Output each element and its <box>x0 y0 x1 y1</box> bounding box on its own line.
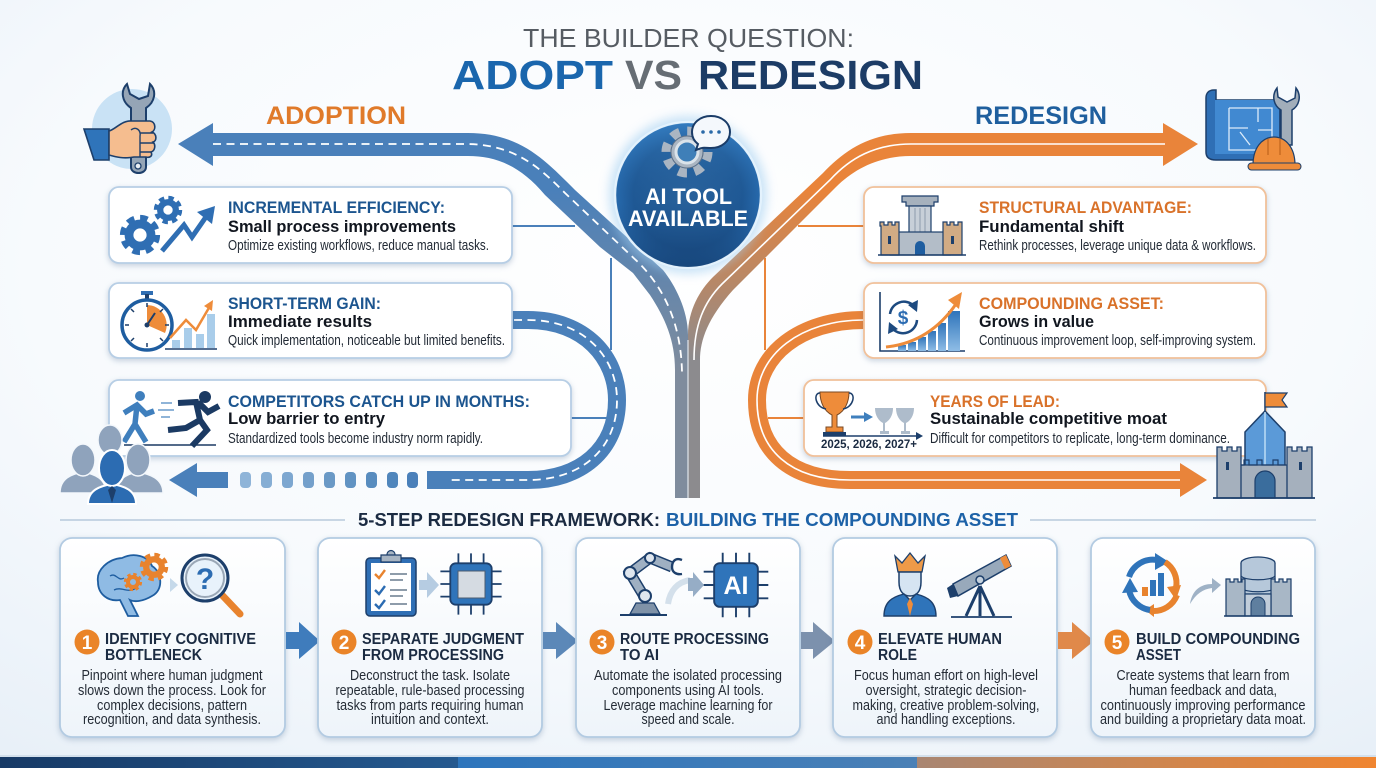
card text: Fundamental shift <box>979 218 1125 236</box>
card text: INCREMENTAL EFFICIENCY: <box>228 198 445 217</box>
step heading: ASSET <box>1136 647 1181 664</box>
card text: COMPOUNDING ASSET: <box>979 294 1164 313</box>
icon: robot arm and AI chip <box>620 553 768 617</box>
panel: step 3 <box>576 538 800 737</box>
icon: castle with column <box>878 196 966 255</box>
step body <box>594 668 782 728</box>
step body <box>852 668 1040 728</box>
panel: compounding asset <box>864 283 1266 358</box>
icon: hand holding wrench <box>84 84 172 173</box>
step badge: 1 <box>82 633 93 654</box>
title: THE BUILDER QUESTION: <box>523 23 854 53</box>
arrow: step 1 to 2 <box>286 622 320 659</box>
card text <box>228 392 530 447</box>
step body: components using AI tools. <box>612 683 764 699</box>
title: REDESIGN <box>698 52 923 98</box>
arrow: adoption road to top-left <box>178 123 688 498</box>
panel: step 2 <box>318 538 542 737</box>
step heading: TO AI <box>620 647 659 664</box>
arrow: step 2 to 3 <box>543 622 578 659</box>
step heading: BOTTLENECK <box>105 647 202 664</box>
step badge <box>332 630 356 654</box>
step badge: 5 <box>1112 633 1123 654</box>
step heading: ROUTE PROCESSING <box>620 631 769 648</box>
icon: crowned leader <box>884 553 936 616</box>
icon: data fortress <box>1224 557 1293 616</box>
card text: Standardized tools become industry norm rapidly. <box>228 431 483 447</box>
step body: Create systems that learn from <box>1116 668 1290 684</box>
arrow: step 3 to 4 <box>801 622 835 659</box>
node label <box>628 184 748 231</box>
card text: YEARS OF LEAD: <box>930 392 1060 411</box>
step heading: FROM PROCESSING <box>362 647 504 664</box>
step body: and building a proprietary data moat. <box>1100 712 1306 728</box>
step badge: 4 <box>855 633 866 654</box>
arrow: adoption lower road to competitors <box>169 320 617 497</box>
step heading <box>362 631 524 664</box>
panel: short-term gain <box>109 283 512 358</box>
central stem divider <box>687 340 689 498</box>
card text <box>228 294 505 349</box>
step body: continuously improving performance <box>1100 698 1306 714</box>
icon: brain and magnifier <box>98 555 240 616</box>
section heading: 5-step framework: 5-STEP REDESIGN FRAMEWORK: <box>358 510 660 530</box>
heading: redesign: REDESIGN <box>975 102 1107 130</box>
card text: COMPETITORS CATCH UP IN MONTHS: <box>228 392 530 411</box>
step body: Automate the isolated processing <box>594 668 782 684</box>
panel: structural advantage <box>864 187 1266 263</box>
step badge: 3 <box>597 633 607 654</box>
panel: step 1 <box>60 538 285 737</box>
node label: AI TOOL <box>645 184 732 209</box>
title: VS <box>625 52 682 98</box>
card text: Quick implementation, noticeable but limited benefits. <box>228 333 505 349</box>
icon: arrow <box>1190 578 1221 604</box>
icon: fortress with flag <box>1213 392 1315 498</box>
title: ADOPT <box>452 52 613 98</box>
card text: Grows in value <box>979 313 1094 331</box>
card text: Immediate results <box>228 313 372 331</box>
step body: human feedback and data, <box>1129 683 1277 699</box>
section heading: 5-step framework: BUILDING THE COMPOUNDING ASSET <box>666 510 1018 530</box>
card text <box>228 198 489 254</box>
arrow: step 4 to 5 <box>1058 622 1094 659</box>
icon: brain and magnifier: ? <box>196 563 214 596</box>
step body: tasks from parts requiring human <box>336 698 524 714</box>
arrow: redesign road to top-right <box>688 123 1198 498</box>
step body: recognition, and data synthesis. <box>83 712 261 728</box>
icon: stopwatch and chart <box>122 291 217 350</box>
card text: Continuous improvement loop, self-improving system. <box>979 333 1256 349</box>
card text: SHORT-TERM GAIN: <box>228 294 381 313</box>
icon: growth chart with dollar <box>880 292 965 351</box>
panel: years of lead <box>804 380 1266 456</box>
step badge <box>848 630 872 654</box>
step heading: IDENTIFY COGNITIVE <box>105 631 256 648</box>
icon: trophy timeline: 2025, 2026, 2027+ <box>821 437 917 451</box>
node label: AVAILABLE <box>628 206 748 231</box>
step body: slows down the process. Look for <box>78 683 266 699</box>
step body: speed and scale. <box>642 712 734 728</box>
step body: complex decisions, pattern <box>97 698 247 714</box>
card text: STRUCTURAL ADVANTAGE: <box>979 198 1192 217</box>
icon: growth chart with dollar: $ <box>898 308 909 329</box>
icon: trophy timeline <box>816 392 923 451</box>
icon: blueprint, wrench and hard hat <box>1206 88 1301 170</box>
central node: AI tool available <box>609 116 767 274</box>
panel: step 4 <box>833 538 1057 737</box>
step heading: ROLE <box>878 647 917 664</box>
step heading <box>1136 631 1300 664</box>
step body: Deconstruct the task. Isolate <box>350 668 510 684</box>
icon: clipboard and chip <box>366 550 502 616</box>
card text: Low barrier to entry <box>228 410 386 428</box>
icon: telescope <box>947 555 1012 617</box>
connector lines: adoption <box>512 226 611 418</box>
icon: speech bubble <box>692 116 730 150</box>
card text: Small process improvements <box>228 218 456 236</box>
icon: gear <box>666 131 708 173</box>
icon: crowd of competitors <box>60 425 163 504</box>
card text <box>979 294 1256 349</box>
step heading: ELEVATE HUMAN <box>878 631 1002 648</box>
step body <box>78 668 266 728</box>
step heading: BUILD COMPOUNDING <box>1136 631 1300 648</box>
step heading <box>620 631 769 664</box>
card text: Optimize existing workflows, reduce manual tasks. <box>228 238 489 254</box>
step body <box>336 668 524 728</box>
step body <box>1100 668 1306 728</box>
step body: repeatable, rule-based processing <box>336 683 524 699</box>
connector lines: redesign <box>765 226 864 418</box>
card text <box>979 198 1256 254</box>
step badge <box>1104 630 1130 654</box>
card text: Sustainable competitive moat <box>930 410 1168 428</box>
step badge <box>74 630 100 654</box>
section heading: 5-step framework <box>60 510 1316 530</box>
step heading: SEPARATE JUDGMENT <box>362 631 524 648</box>
step heading <box>878 631 1002 664</box>
icon: gears and rising arrow <box>124 198 215 252</box>
step body: Focus human effort on high-level <box>854 668 1038 684</box>
step body: making, creative problem-solving, <box>852 698 1040 714</box>
step body: Pinpoint where human judgment <box>82 668 262 684</box>
icon: robot arm and AI chip: AI <box>724 572 748 600</box>
step heading <box>105 631 256 664</box>
panel: competitors catch up <box>109 380 571 456</box>
title <box>452 23 923 98</box>
panel: step 5 <box>1091 538 1315 737</box>
step badge: 2 <box>339 633 349 654</box>
icon: runners <box>124 391 219 446</box>
step body: oversight, strategic decision- <box>866 683 1027 699</box>
step body: intuition and context. <box>371 712 489 728</box>
icon: improvement cycle <box>1122 553 1181 617</box>
arrow: redesign lower road to castle <box>757 320 1207 497</box>
step badge <box>590 630 614 654</box>
panel: incremental efficiency <box>109 187 512 263</box>
card text: Rethink processes, leverage unique data & workflows. <box>979 238 1256 254</box>
heading: adoption: ADOPTION <box>266 102 406 130</box>
footer colour bar <box>0 755 1376 768</box>
card text: Difficult for competitors to replicate, long-term dominance. <box>930 431 1230 447</box>
step body: and handling exceptions. <box>876 712 1016 728</box>
step body: Leverage machine learning for <box>604 698 773 714</box>
card text <box>930 392 1230 447</box>
